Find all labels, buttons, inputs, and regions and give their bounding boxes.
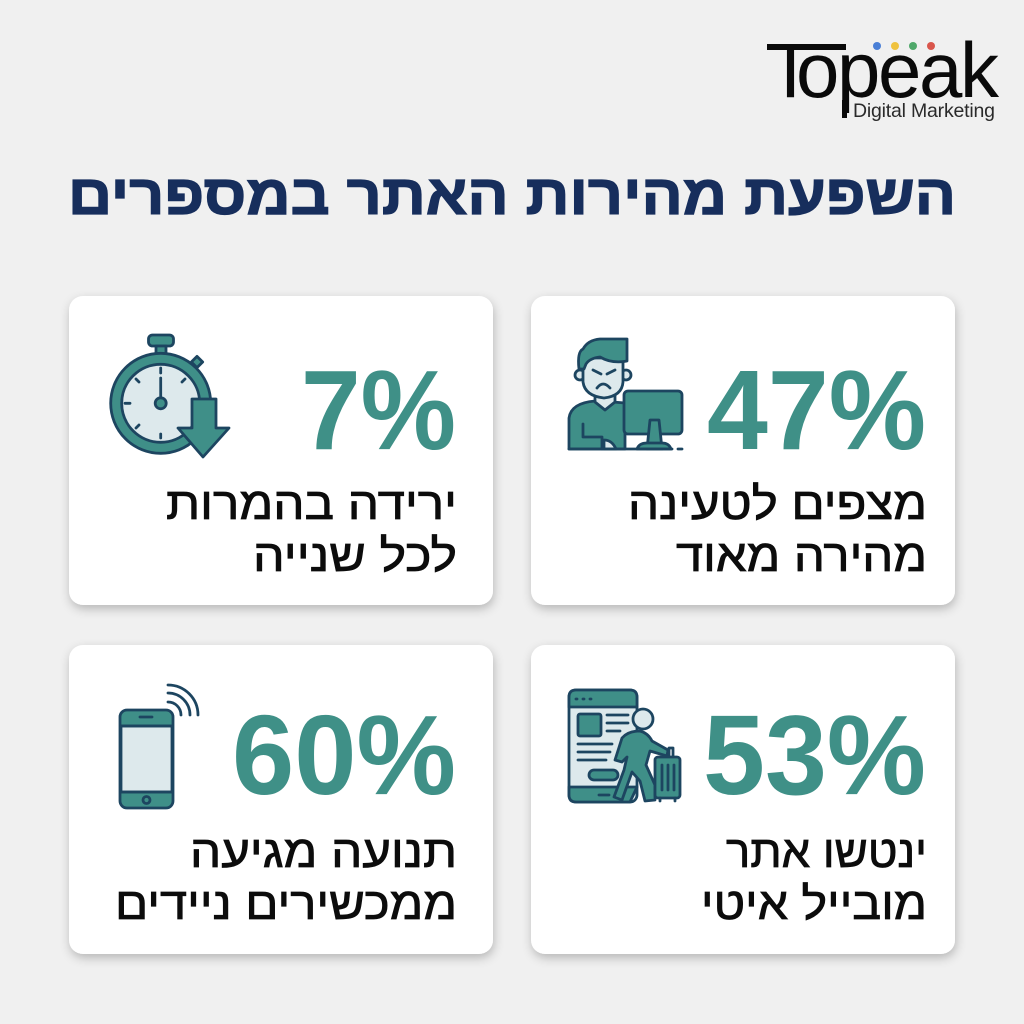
panel: 47% expect fast loading	[531, 296, 955, 605]
label: 7%	[166, 478, 457, 581]
label: 53%	[701, 826, 927, 929]
label: 47%	[628, 478, 927, 581]
stat: 53%: 53%	[703, 692, 926, 818]
stat: 7%: 7%	[301, 347, 456, 473]
label: 53%: ינטשו אתר	[726, 826, 927, 877]
stat: 60%: 60%	[232, 692, 456, 818]
label: 60%: תנועה מגיעה	[190, 826, 457, 877]
label: 47%: מהירה מאוד	[676, 530, 927, 581]
label: 7%: ירידה בהמרות	[166, 478, 457, 529]
panel: 53% abandon slow mobile site	[531, 645, 955, 954]
icon: stopwatch with down arrow	[111, 335, 229, 457]
label: 60%	[115, 826, 457, 929]
label: 7%: לכל שנייה	[253, 530, 457, 581]
logo: Topeak Digital Marketing: opeak	[796, 26, 1000, 114]
logo: Topeak Digital Marketing: Digital Marketing	[853, 100, 995, 122]
icon: frustrated user at computer	[569, 339, 682, 449]
icon: smartphone with signal	[120, 685, 198, 808]
panel: 60% mobile traffic	[69, 645, 493, 954]
title: השפעת מהירות האתר במספרים	[68, 163, 956, 226]
label: 47%: מצפים לטעינה	[628, 478, 927, 529]
logo: Topeak Digital Marketing: T	[767, 28, 814, 114]
label: 53%: מובייל איטי	[701, 878, 927, 929]
stat: 47%: 47%	[707, 347, 926, 473]
icon: person leaving phone site with suitcase	[569, 690, 680, 802]
label: 60%: ממכשירים ניידים	[115, 878, 457, 929]
panel: 7% conversion drop	[69, 296, 493, 605]
